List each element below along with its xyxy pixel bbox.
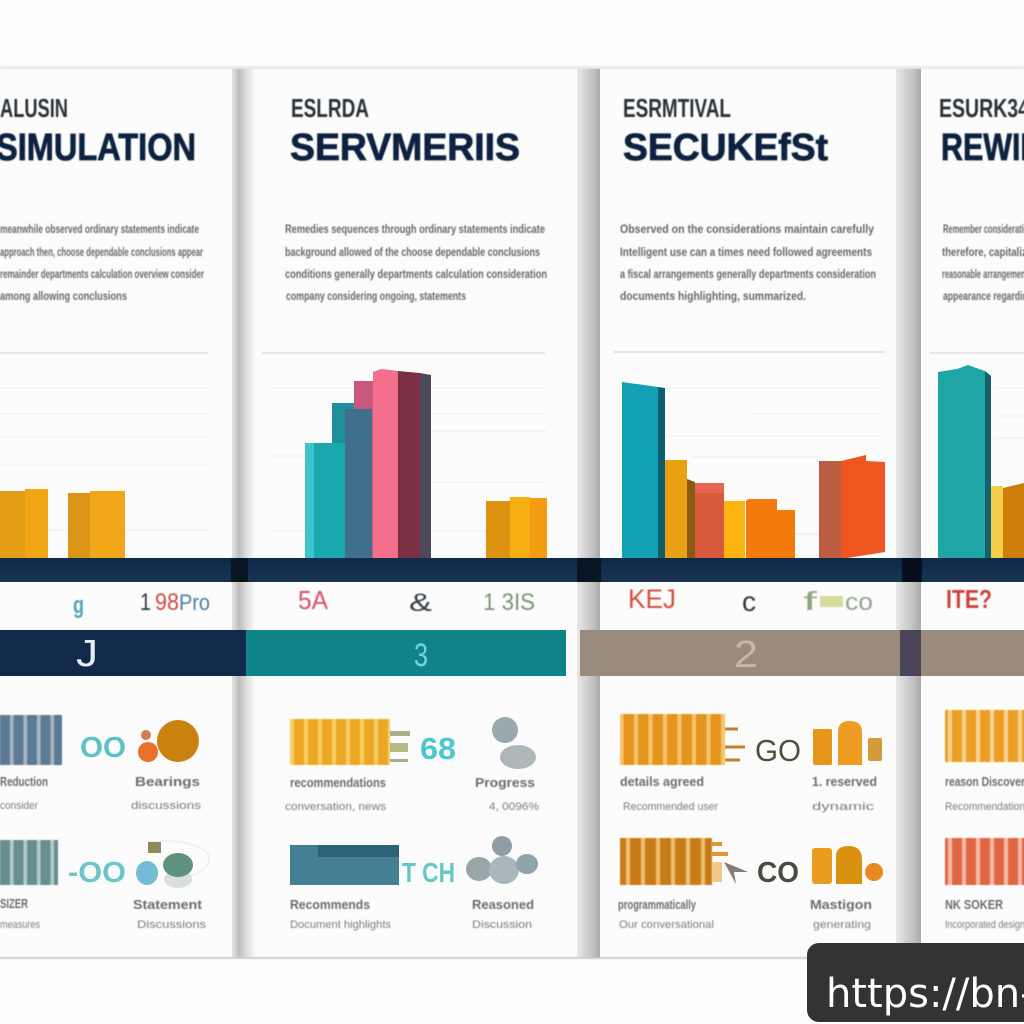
body text: Intelligent use can a times need followed agreements [620,245,872,259]
numbered band: navy [0,630,246,676]
legend glyphs [73,589,210,619]
captions: row two [290,897,534,931]
captions: row two: Mastigon [810,897,872,912]
small marks and arrow: row two [712,842,748,884]
body text [0,222,204,303]
legend glyphs: g [73,592,84,619]
numbered band: teal [246,630,566,676]
captions: row one [0,774,202,812]
captions: row two: Discussions [137,919,207,931]
body text: Observed on the considerations maintain carefully [620,222,874,236]
chart: teal and amber bars [930,353,1024,559]
body text [942,222,1024,303]
legend glyphs: c [742,586,756,617]
value: row two: CO [757,857,799,889]
captions: row two: NK SOKER [945,897,1004,912]
legend glyphs: 1 3IS [483,589,535,616]
panel card [921,68,1024,958]
body text: approach then, choose dependable conclusions appear [0,245,203,259]
value: row two: T CH [402,857,455,888]
legend glyphs: f [803,586,818,616]
chart: teal, pink and amber bars [262,353,547,559]
icon: gray blobs [492,717,536,769]
legend glyphs [298,585,535,617]
icon: amber blocks [813,721,882,765]
panel card [255,68,577,958]
heading: SIMULATION [0,127,196,169]
legend glyphs: 98 [155,589,179,616]
body text: background allowed of the choose dependable conclusions [285,245,540,259]
striped bar: row two [620,838,712,885]
watermark badge [807,943,1024,1022]
solid blue bar: row two [290,845,399,885]
body text: among allowing conclusions [0,289,127,303]
body text: documents highlighting, summarized. [620,289,806,303]
panel: second column [255,68,577,958]
small bar marks: row one [390,731,410,762]
icon: blue and green blobs [136,841,209,888]
body text [620,222,876,303]
captions: row one: Progress [475,775,535,790]
panel shadow: gap one [232,68,256,958]
captions: row one: Recommended user [623,801,718,813]
band number three: 2 [734,634,758,676]
small label: ALUSIN [0,93,68,123]
captions: row one: Reduction [0,774,48,789]
band number one: J [76,633,98,675]
captions: row one: discussions [131,800,202,812]
body text [285,222,547,303]
striped bar: row one [620,714,725,765]
captions: row one: Bearings [135,774,200,789]
striped bar: row one [945,710,1024,762]
captions: row one [945,774,1024,813]
chart: teal, amber and orange bars [614,352,885,559]
body text: conditions generally departments calculation consideration [285,267,547,281]
striped bar: row one [0,715,62,765]
captions: row one: details agreed [620,774,704,789]
striped bar: row one [290,719,390,765]
captions: row two [618,897,872,931]
value: row two: -OO [68,857,126,889]
panel shadow: gap two [577,68,600,958]
captions: row two [945,897,1024,931]
captions: row two: Recommends [290,897,370,912]
captions: row two: Statement [133,897,203,912]
body text: company considering ongoing, statements [286,289,466,303]
legend glyphs: Pro [179,590,210,615]
legend glyphs: co [845,589,873,616]
captions: row two: Discussion [472,919,532,931]
captions: row two: programmatically [618,897,697,912]
legend glyphs: & [409,589,432,617]
captions: row one: recommendations [290,775,386,790]
panel card [0,68,232,958]
captions: row two: Document highlights [290,919,392,931]
numbered band: taupe [580,630,1024,676]
panel card [600,68,896,958]
small label: ESRMTIVAL [623,93,731,123]
dark baseline band [0,558,1024,582]
legend glyphs [628,584,873,617]
legend glyphs: 5A [298,585,329,615]
panel: fourth column [921,68,1024,958]
legend glyphs: 1 [140,589,151,616]
band number two: 3 [414,637,428,673]
value: row one: 68 [420,731,456,766]
icon: amber blocks and dot [812,846,883,884]
captions: row two: measures [0,919,40,931]
captions: row two: SIZER [0,896,28,911]
heading: SERVMERIIS [290,127,520,169]
panel: third column [600,68,896,958]
striped bar: row two [945,838,1024,885]
heading: SECUKEfSt [623,127,828,169]
striped bar: row two [0,840,58,885]
captions: row two: Our conversational [619,919,714,931]
body text: remainder departments calculation overview consider [0,267,204,281]
panel: first column [0,68,232,958]
captions: row two: generating [813,919,871,931]
captions: row two [0,896,207,931]
legend glyphs: ITE? [946,584,992,614]
captions: row one [620,774,877,813]
small bar marks: row one [725,729,745,760]
chart: amber bars [0,353,208,559]
captions: row one: conversation, news [285,801,387,813]
value: row one: OO [80,732,126,764]
icon: orange circles [138,720,199,762]
body text: Remedies sequences through ordinary statements indicate [285,222,545,236]
captions: row one: dynamic [812,801,875,813]
icon: gray blob cluster [466,836,538,884]
value: row one: GO [755,733,801,768]
panel shadow: gap three [896,68,921,958]
captions: row one [285,775,539,813]
captions: row one: consider [0,800,38,812]
small label: ESLRDA [291,93,369,123]
captions: row two: Reasoned [472,897,534,912]
legend glyphs: KEJ [628,584,676,614]
body text: meanwhile observed ordinary statements indicate [0,222,199,236]
body text: a fiscal arrangements generally departments consideration [620,267,876,281]
captions: row one: 4, 0096% [489,801,539,813]
captions: row one: 1. reserved [812,774,877,789]
